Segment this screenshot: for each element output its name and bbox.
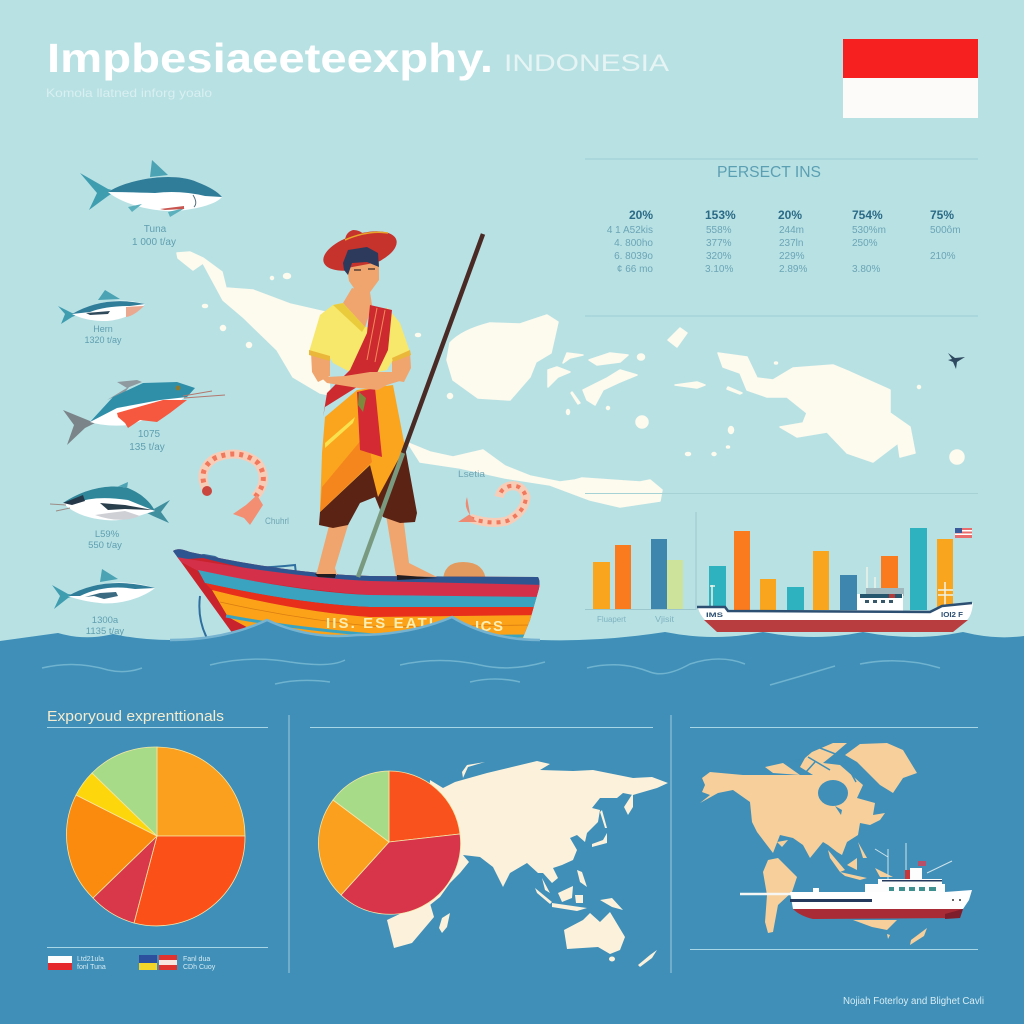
table column 1 xyxy=(607,208,653,275)
table column 3: 2.89% xyxy=(779,264,807,275)
upper arms xyxy=(311,352,411,382)
red sash xyxy=(323,305,392,417)
heading: percentages: PERSECT INS xyxy=(717,164,821,181)
table column 5 xyxy=(930,208,961,262)
table column 2 xyxy=(705,208,736,275)
bar chart: small: Vjisit xyxy=(655,615,675,624)
hat xyxy=(319,224,401,278)
table column 5: 75% xyxy=(930,208,954,222)
fish: left-facing tuna xyxy=(50,482,170,523)
ship: cargo: IOI2 F xyxy=(941,612,964,619)
map: world shipping routes xyxy=(700,743,927,945)
legs xyxy=(316,522,349,575)
map: Asia and Australia xyxy=(387,761,668,967)
ship: cargo xyxy=(697,567,973,632)
table column 1: 6. 8039o xyxy=(614,251,653,262)
pie chart: exports xyxy=(67,747,245,926)
table column 1: 20% xyxy=(629,208,653,222)
table column 2: 3.10% xyxy=(705,264,733,275)
label: red-bellied tuna: 135 t/ay xyxy=(129,442,165,453)
subtitle: Komola llatned inforg yoalo xyxy=(46,86,212,100)
icon: shell xyxy=(443,562,486,582)
trousers xyxy=(319,447,417,528)
fish: red-bellied tuna xyxy=(63,380,225,445)
pie chart: export destinations xyxy=(318,771,461,914)
label: left-facing tuna xyxy=(88,529,122,551)
panel: percentages table xyxy=(585,158,978,494)
table column 5: 210% xyxy=(930,251,956,262)
hair xyxy=(343,247,379,275)
table column 4: 530%m xyxy=(852,225,886,236)
sarong xyxy=(320,385,405,512)
heading: export: Exporyoud exprenttionals xyxy=(47,708,224,725)
table column 1: ¢ 66 mo xyxy=(617,264,653,275)
table column 3: 229% xyxy=(779,251,805,262)
icon: right shrimp xyxy=(458,486,526,522)
label: tuna xyxy=(132,224,176,248)
fish: small tuna xyxy=(58,290,145,324)
hull xyxy=(173,549,540,638)
panel: export pie xyxy=(47,708,268,971)
table column 3: 237ln xyxy=(779,238,803,249)
label: left-facing tuna: L59% xyxy=(95,529,120,540)
table column 3: 20% xyxy=(778,208,802,222)
icon: small flag xyxy=(955,528,972,538)
table column 3 xyxy=(778,208,807,275)
table column 4: 3.80% xyxy=(852,264,880,275)
table column 4: 754% xyxy=(852,208,883,222)
icon: plane xyxy=(948,353,965,369)
forearms and hands xyxy=(313,367,410,390)
figure: fisherman xyxy=(309,224,483,580)
icon: left shrimp xyxy=(202,454,263,525)
title: INDONESIA xyxy=(504,50,669,77)
label: left-facing tuna: 550 t/ay xyxy=(88,540,122,551)
label: tuna: 1 000 t/ay xyxy=(132,237,176,248)
bar chart: small: Fluapert xyxy=(597,615,627,624)
icon: Indonesian flag xyxy=(843,39,978,118)
label: bottom tuna: 1135 t/ay xyxy=(86,626,124,637)
legend: fonl Tuna xyxy=(77,964,106,971)
table column 1: 4. 800ho xyxy=(614,238,653,249)
table column 2: 153% xyxy=(705,208,736,222)
fish: tuna xyxy=(80,160,222,217)
label: small tuna: Hern xyxy=(93,324,113,334)
footer credit: Nojiah Foterloy and Blighet Cavli xyxy=(843,996,984,1007)
table column 4 xyxy=(852,208,886,275)
fish: bottom tuna xyxy=(52,569,155,609)
boat lettering: ICS xyxy=(475,618,503,635)
boat lettering: IIS. ES EATI xyxy=(326,615,433,632)
sea xyxy=(0,617,1024,1024)
label: red-bellied tuna xyxy=(129,429,165,453)
table column 5: 500ôm xyxy=(930,225,961,236)
label: small tuna: 1320 t/ay xyxy=(84,335,122,345)
title xyxy=(47,35,669,81)
label: right shrimp: Lsetia xyxy=(458,469,486,480)
label: small tuna xyxy=(84,324,122,345)
neck xyxy=(343,288,372,328)
label: tuna: Tuna xyxy=(144,224,167,235)
wave highlights xyxy=(42,659,940,685)
boat xyxy=(173,549,540,638)
ship: cargo: IMS xyxy=(706,613,723,619)
title: Impbesiaeeteexphy. xyxy=(47,35,493,81)
legend xyxy=(48,955,216,971)
table column 2: 558% xyxy=(706,225,732,236)
boat lettering xyxy=(326,615,503,635)
bar chart: small xyxy=(585,512,696,624)
label: bottom tuna xyxy=(86,615,124,637)
hanging cloth xyxy=(357,388,382,457)
table column 1: 4 1 A52kis xyxy=(607,225,653,236)
label: bottom tuna: 1300a xyxy=(92,615,119,626)
label: left shrimp: Chuhrl xyxy=(265,516,289,527)
legend: Fanl dua xyxy=(183,956,210,963)
table column 3: 244m xyxy=(779,225,804,236)
table column 4: 250% xyxy=(852,238,878,249)
label: red-bellied tuna: 1075 xyxy=(138,429,161,440)
table column 2: 377% xyxy=(706,238,732,249)
bar chart: large xyxy=(709,528,972,610)
table column 2: 320% xyxy=(706,251,732,262)
shirt xyxy=(309,303,372,372)
face xyxy=(347,262,379,295)
legend: Ltd21ula xyxy=(77,956,104,963)
map: Indonesian archipelago xyxy=(177,252,964,507)
pole xyxy=(403,234,483,453)
ship: ferry xyxy=(740,843,972,919)
legend: CDh Cuoy xyxy=(183,964,216,971)
